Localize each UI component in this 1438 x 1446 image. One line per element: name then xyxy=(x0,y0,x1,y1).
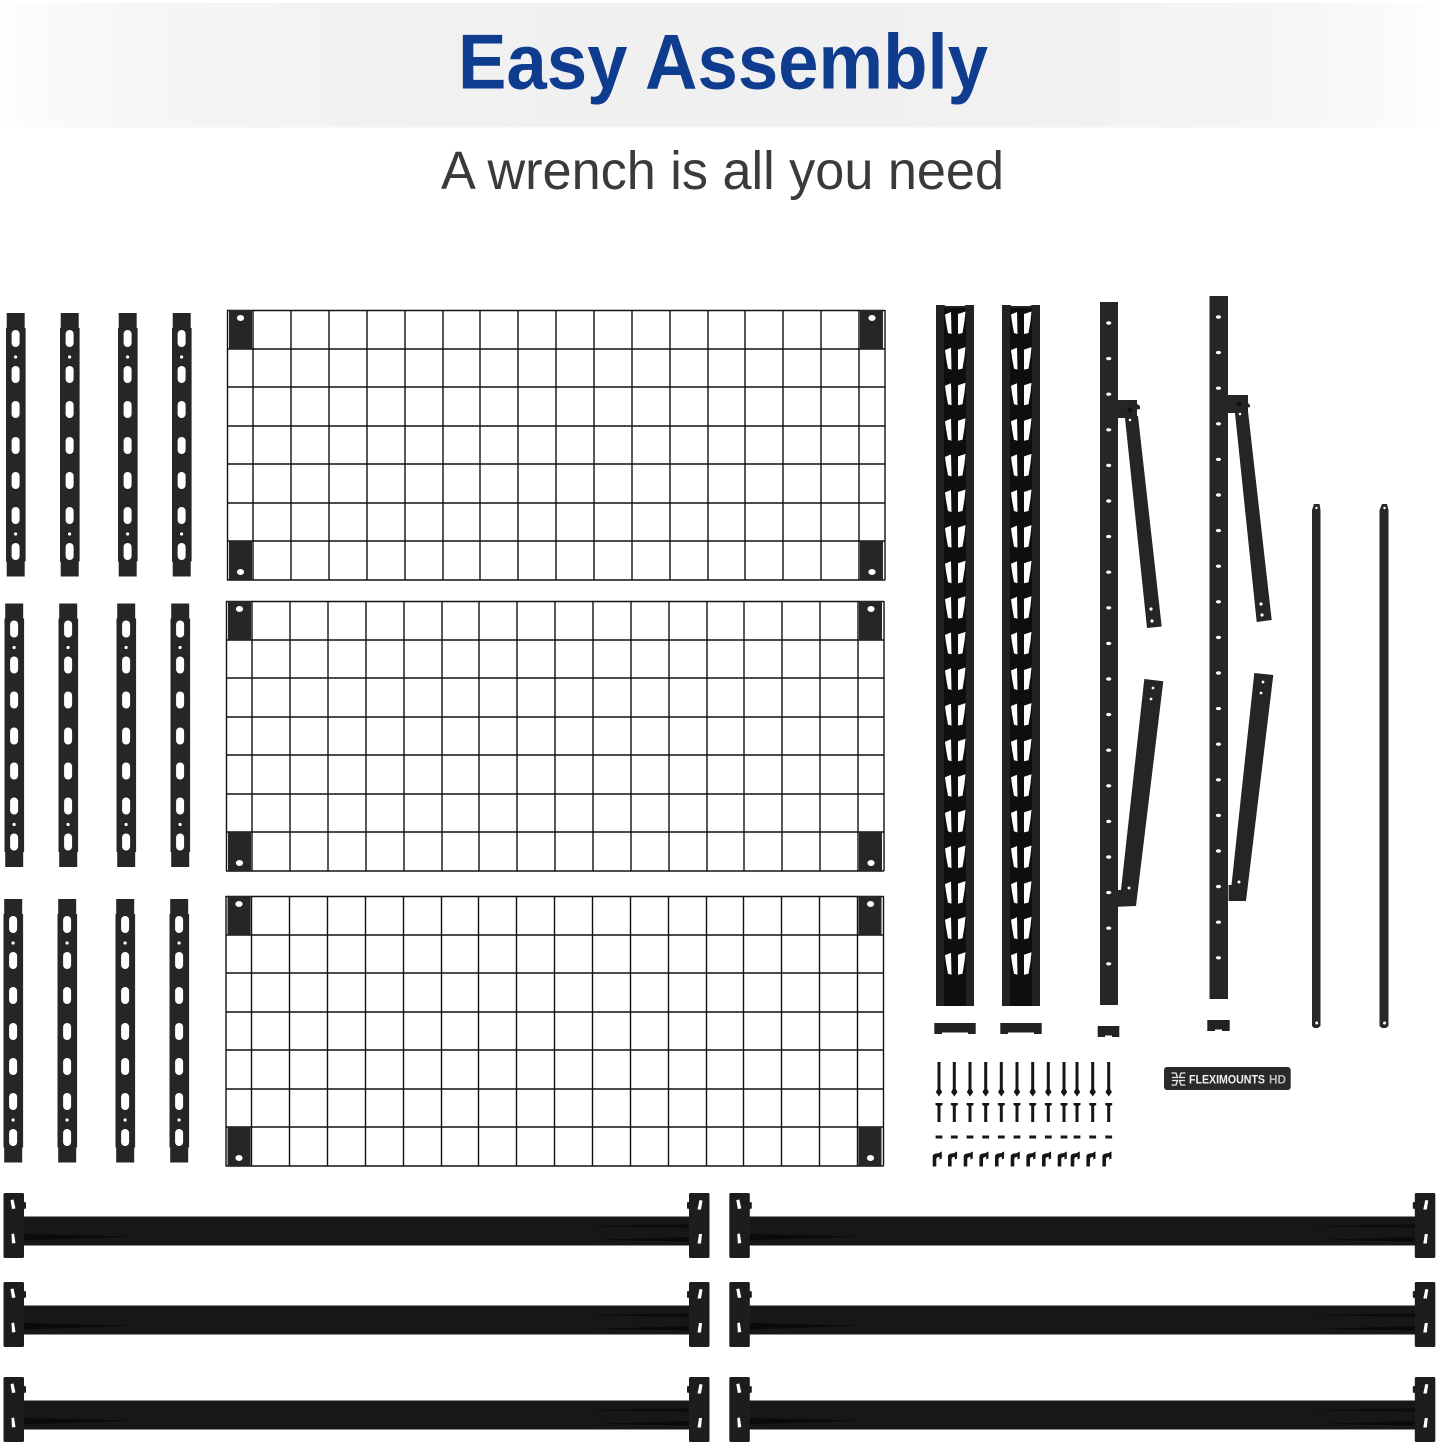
mesh panel 2 xyxy=(226,601,884,871)
horizontal beams, right column xyxy=(729,1193,1435,1442)
brand suffix: HD xyxy=(1269,1072,1286,1086)
thin rod right xyxy=(1380,504,1388,1028)
small slotted strips: 12 connector plates xyxy=(4,313,192,1162)
post end caps xyxy=(934,1020,1230,1037)
subtitle: A wrench is all you need xyxy=(441,141,1004,201)
horizontal beams, left column xyxy=(4,1193,710,1442)
brand plate xyxy=(1164,1067,1291,1090)
brand name: FLEXIMOUNTS xyxy=(1189,1072,1265,1086)
thin rod left xyxy=(1312,504,1320,1028)
flat upright with folding arms, right xyxy=(1210,296,1273,999)
flat upright with folding arms, left xyxy=(1100,302,1163,1005)
mesh panel 1 xyxy=(227,310,885,580)
hardware: bolts, washers and hooks xyxy=(933,1062,1112,1166)
wire mesh shelf panels xyxy=(226,310,885,1166)
mesh panel 3 xyxy=(226,896,884,1166)
brand logo icon xyxy=(1172,1073,1186,1085)
channel posts xyxy=(936,305,1040,1006)
title: Easy Assembly xyxy=(458,18,988,106)
title band xyxy=(0,3,1438,128)
